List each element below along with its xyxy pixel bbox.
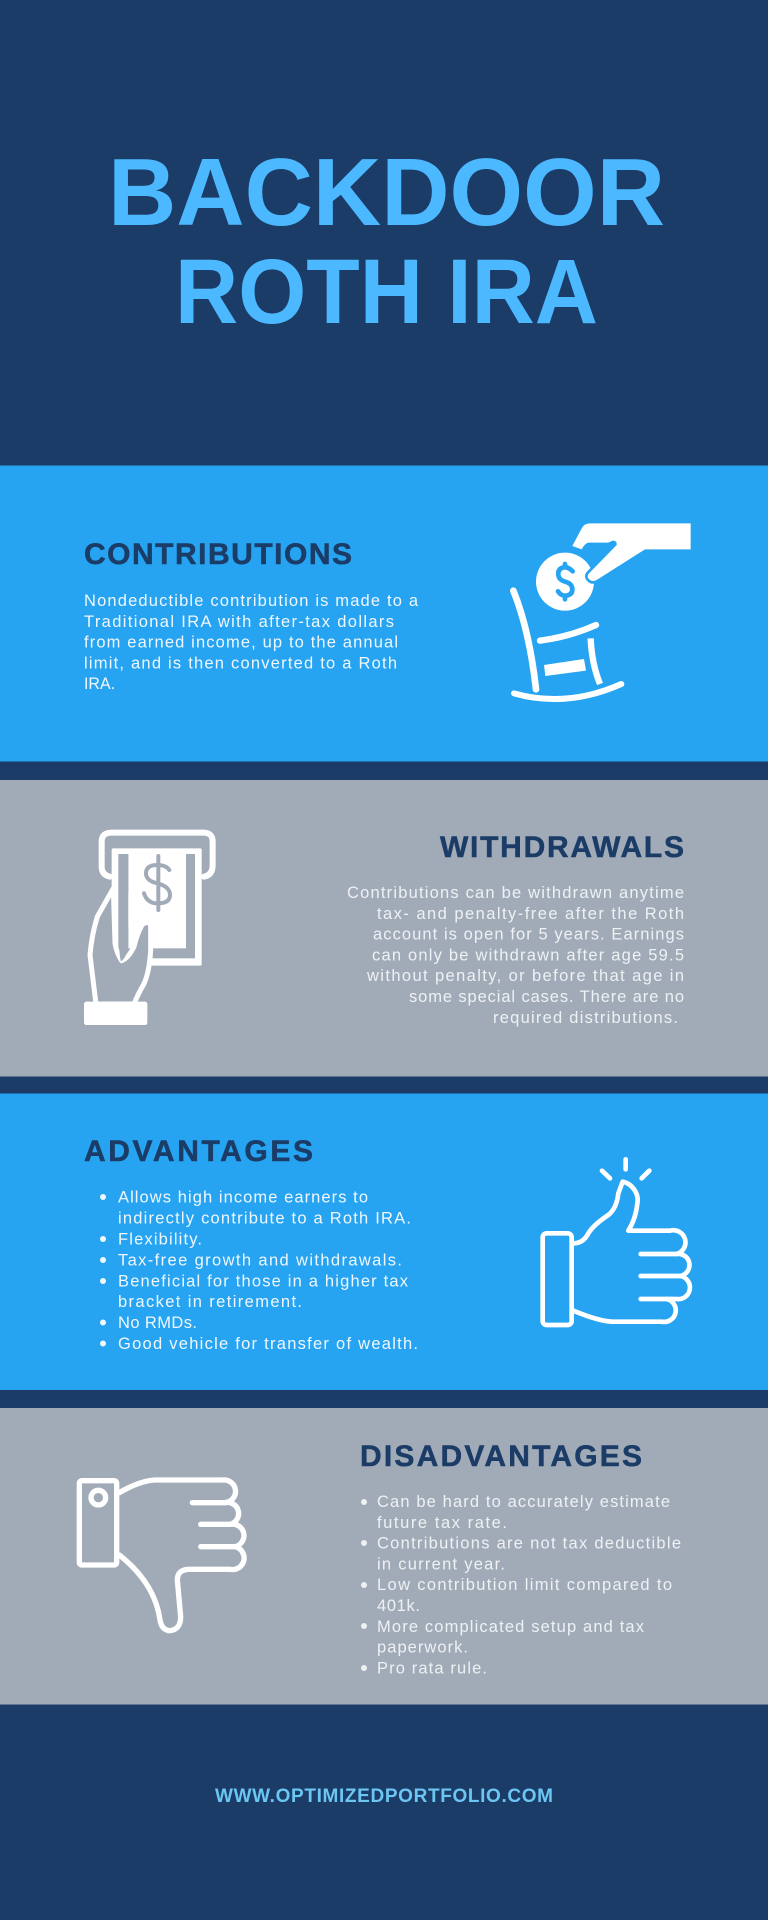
text block: contributions: Traditional IRA with after-tax dollars: [84, 613, 394, 631]
panel: withdrawals: [0, 780, 768, 1076]
icon: hand inserting dollar bill: [84, 833, 213, 1025]
bullet list: disadvantages: Can be hard to accurately estimate: [377, 1493, 670, 1511]
panel: advantages: [0, 1094, 768, 1390]
text block: withdrawals: Contributions can be withdrawn anytime: [347, 884, 684, 902]
bullet list: advantages: indirectly contribute to a Roth IRA.: [118, 1210, 411, 1228]
heading: advantages: ADVANTAGES: [84, 1135, 313, 1168]
title: [108, 139, 665, 343]
bullet list: advantages: Beneficial for those in a higher tax: [118, 1272, 409, 1290]
text block: withdrawals: some special cases. There are no: [409, 988, 684, 1006]
bullet list: advantages: Good vehicle for transfer of wealth.: [118, 1335, 418, 1353]
title: BACKDOOR: [108, 139, 665, 246]
bullet list: advantages: Allows high income earners to: [118, 1189, 368, 1207]
bullet list: disadvantages: More complicated setup and tax: [377, 1618, 645, 1636]
text block: withdrawals: can only be withdrawn after age 59.5: [372, 946, 684, 964]
text block: withdrawals: without penalty, or before that age in: [366, 967, 684, 985]
bullet list: disadvantages: paperwork.: [377, 1639, 468, 1657]
bullet list: advantages: bracket in retirement.: [118, 1293, 302, 1311]
bullet list: advantages: [100, 1189, 418, 1353]
text block: contributions: from earned income, up to the annual: [84, 634, 398, 652]
bullet list: disadvantages: 401k.: [377, 1597, 420, 1615]
icon: thumbs down: [79, 1480, 244, 1631]
bullet list: disadvantages: future tax rate.: [377, 1514, 507, 1532]
text block: contributions: limit, and is then converted to a Roth: [84, 654, 397, 672]
icon: thumbs up: [543, 1159, 690, 1325]
bullet list: disadvantages: Pro rata rule.: [377, 1659, 487, 1677]
bullet list: disadvantages: Low contribution limit compared to: [377, 1576, 672, 1594]
heading: disadvantages: DISADVANTAGES: [360, 1440, 642, 1473]
bullet list: disadvantages: [361, 1493, 681, 1677]
panel: contributions: [0, 466, 768, 762]
text block: withdrawals: tax- and penalty-free after the Roth: [377, 905, 684, 923]
bullet list: advantages: Tax-free growth and withdrawals.: [118, 1251, 402, 1269]
bullet list: disadvantages: in current year.: [377, 1555, 505, 1573]
bullet list: disadvantages: Contributions are not tax deductible: [377, 1535, 681, 1553]
text block: contributions: [84, 592, 419, 693]
text block: withdrawals: [347, 884, 684, 1027]
icon: hand dropping coin over rocking chair: [513, 523, 691, 699]
panel: disadvantages: [0, 1408, 768, 1704]
bullet list: advantages: Flexibility.: [118, 1230, 202, 1248]
title: ROTH IRA: [175, 241, 598, 343]
footer url: WWW.OPTIMIZEDPORTFOLIO.COM: [215, 1786, 553, 1807]
text block: contributions: Nondeductible contribution is made to a: [84, 592, 419, 610]
text block: withdrawals: required distributions.: [493, 1009, 678, 1027]
heading: withdrawals: WITHDRAWALS: [440, 831, 684, 864]
bullet list: advantages: No RMDs.: [118, 1314, 197, 1332]
text block: contributions: IRA.: [84, 675, 115, 693]
heading: contributions: CONTRIBUTIONS: [84, 538, 352, 571]
text block: withdrawals: account is open for 5 years. Earnings: [373, 926, 684, 944]
